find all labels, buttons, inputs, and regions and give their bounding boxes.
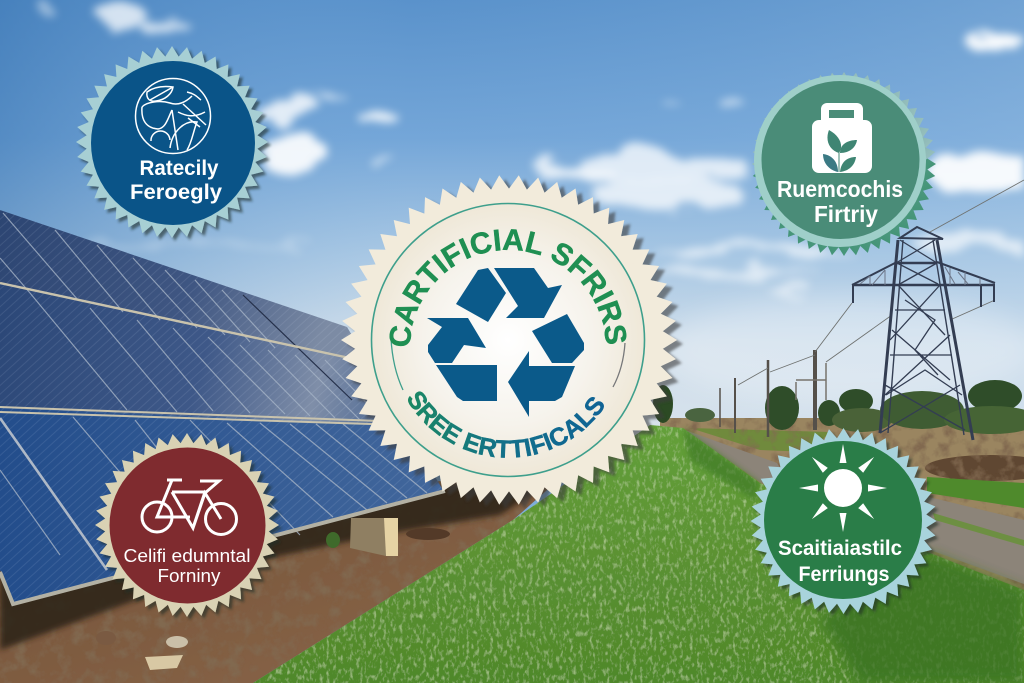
- side arcs: [391, 338, 625, 390]
- panel seams: [0, 213, 427, 555]
- dark grass patch: [683, 428, 1024, 683]
- icon: sun: [799, 444, 887, 532]
- cell texture: [0, 210, 443, 604]
- badge: top right teal: [653, 0, 1024, 358]
- label: Ferriungs: [798, 563, 890, 586]
- middle panel row: [0, 283, 404, 425]
- icon: recycling arrows: [427, 268, 584, 417]
- seal: [653, 0, 1024, 358]
- seal: [12, 0, 332, 297]
- label: [130, 157, 222, 204]
- badge: bottom right green: [689, 370, 998, 672]
- panel shadow on soil: [0, 470, 570, 650]
- roadside grass strips: [927, 477, 1024, 546]
- icon: bag with plant: [812, 103, 872, 173]
- label: [124, 546, 250, 586]
- label: Ruemcochis: [777, 176, 903, 202]
- gravel path: [685, 430, 1024, 584]
- horizontal rails: [0, 283, 400, 570]
- scalloped seal: [193, 27, 825, 653]
- icon: bicycle: [142, 480, 236, 534]
- label: Firtriy: [814, 201, 878, 227]
- upper panel row: [0, 210, 368, 362]
- label: Feroegly: [130, 181, 222, 204]
- panel frame: [0, 491, 445, 604]
- solar panel array: [0, 210, 445, 604]
- grass embankment: [253, 425, 1024, 683]
- pale haze above the horizon: [660, 295, 1024, 405]
- label: Scaitiaiastilc: [778, 537, 902, 560]
- sky background: [0, 0, 1024, 460]
- outer ring: [372, 204, 644, 476]
- icon: globe with leaves and birds: [136, 78, 210, 154]
- seal: [689, 370, 998, 672]
- distant field and brush: [660, 418, 1024, 598]
- stones and concrete block: [96, 518, 450, 670]
- badge face: [764, 441, 922, 599]
- heading arc text: CARTIFICIAL SFRIRS: [389, 229, 626, 346]
- utility poles and wires: [720, 180, 1024, 437]
- badge: top left blue: [12, 0, 332, 297]
- lower panel row: [0, 408, 443, 604]
- tree line: [653, 380, 1024, 434]
- badge: central recycling certificate: [341, 175, 684, 509]
- clouds: [39, 0, 1024, 295]
- label: [778, 537, 902, 586]
- label: Forniny: [158, 566, 220, 586]
- lower arc text: SREE ERTTIFICALS: [408, 391, 604, 458]
- light ring: [754, 75, 926, 247]
- badge: bottom left red: [34, 376, 340, 674]
- soil bank: [0, 470, 570, 683]
- label: Ratecily: [140, 157, 219, 180]
- transmission pylon: [852, 227, 995, 440]
- badge face: [762, 81, 920, 239]
- dark module seam: [243, 295, 352, 400]
- inner seal face: [372, 204, 644, 476]
- seal: [34, 376, 340, 674]
- badge face: [91, 61, 255, 225]
- label: [777, 176, 903, 227]
- label: Celifi edumntal: [124, 546, 250, 566]
- badge face: [110, 448, 266, 604]
